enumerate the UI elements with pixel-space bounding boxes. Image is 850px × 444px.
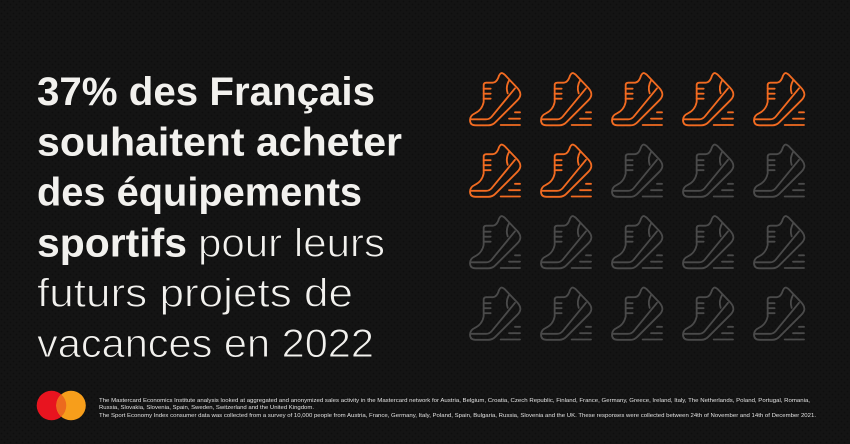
icon: Mastercard logo <box>37 391 86 420</box>
footnote: The Mastercard Economics Institute analysis looked at aggregated and anonymized sales activity in the Mastercard network for Austria, Belgium, Croatia, Czech Republic, Finland, France, Germany, Greece, Ireland, Italy, The Netherlands, Poland, Portugal, Romania, <box>99 398 810 404</box>
headline: vacances en 2022 <box>37 322 374 366</box>
footnote: The Sport Economy Index consumer data was collected from a survey of 10,000 people from Austria, France, Germany, Italy, Poland, Spain, Bulgaria, Russia, Slovenia and the UK. These responses were collected between 24th of November and 14th of December 2021. <box>99 413 816 419</box>
footnote: Russia, Slovakia, Slovenia, Spain, Sweden, Switzerland and the United Kingdom. <box>99 405 314 411</box>
icon: orange shoes (row 1 and start of row 2) <box>470 73 804 197</box>
footnote <box>99 398 816 419</box>
headline: futurs projets de <box>37 272 353 316</box>
headline: pour leurs <box>198 222 385 266</box>
headline: des équipements <box>37 170 362 214</box>
headline: souhaitent acheter <box>37 120 402 164</box>
headline: 37% des Français <box>37 70 375 114</box>
headline: sportifs <box>37 222 187 266</box>
headline <box>37 70 402 366</box>
icon: grey shoes <box>470 145 804 340</box>
icon grid: 7 of 20 shoes highlighted <box>470 73 804 340</box>
